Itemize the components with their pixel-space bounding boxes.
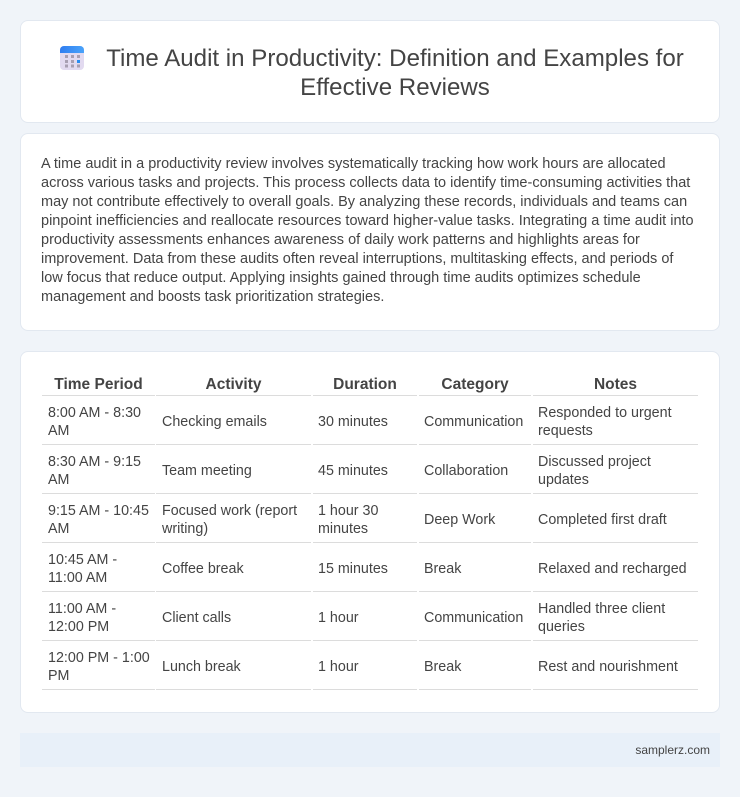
row: 8:00 AM: Communication xyxy=(424,414,523,430)
row: 11:00 AM: 11:00 AM - xyxy=(48,601,116,617)
table headers: Duration xyxy=(333,376,397,393)
row: 11:00 AM: 1 hour xyxy=(318,610,359,626)
text block: description: may not contribute effectively to overall goals. By analyzing these records, individuals and teams can xyxy=(41,194,687,210)
row: 9:15 AM: 9:15 AM - 10:45 xyxy=(48,503,149,519)
table headers: Notes xyxy=(594,376,637,393)
text block: description: A time audit in a productivity review involves systematically tracking how work hours are allocated xyxy=(41,156,666,172)
panel: description xyxy=(20,133,720,331)
row: 9:15 AM: 1 hour 30 xyxy=(318,503,378,519)
table headers: Activity xyxy=(206,376,262,393)
row: 8:00 AM: Checking emails xyxy=(162,414,267,430)
row: 8:00 AM: Responded to urgent xyxy=(538,405,672,421)
row: 8:30 AM: Collaboration xyxy=(424,463,508,479)
row: 9:15 AM: Focused work (report xyxy=(162,503,297,519)
text block: description: low focus that reduce output. Applying insights gained through time audits optimizes schedule xyxy=(41,270,641,286)
row: 12:00 PM: Break xyxy=(424,659,461,675)
row: 9:15 AM xyxy=(48,503,667,537)
row: 12:00 PM: 1 hour xyxy=(318,659,359,675)
text block: description: productivity assessments enhances awareness of daily work patterns and highlights areas for xyxy=(41,232,640,248)
row: 10:45 AM: Relaxed and recharged xyxy=(538,561,687,577)
row: 8:30 AM: 45 minutes xyxy=(318,463,388,479)
row: 8:00 AM xyxy=(48,405,672,439)
text block: description: pinpoint inefficiencies and reallocate resources toward higher-value tasks. Integrating a time audit into xyxy=(41,213,694,229)
panel: title card xyxy=(20,20,720,123)
text block: description: improvement. Data from these audits often reveal interruptions, multitasking effects, and periods of xyxy=(41,251,673,267)
row: 12:00 PM: 12:00 PM - 1:00 xyxy=(48,650,150,666)
text block: description: across various tasks and projects. This process collects data to identify time-consuming activities that xyxy=(41,175,690,191)
title: Time Audit in Productivity: Definition and Examples for xyxy=(106,45,684,72)
row: 9:15 AM: AM xyxy=(48,521,69,537)
table headers: Category xyxy=(441,376,509,393)
row: 8:00 AM: requests xyxy=(538,423,593,439)
title: Effective Reviews xyxy=(300,74,490,101)
row: 11:00 AM: queries xyxy=(538,619,585,635)
row: 8:00 AM: 8:00 AM - 8:30 xyxy=(48,405,141,421)
row: 9:15 AM: Deep Work xyxy=(424,512,495,528)
row: 12:00 PM: Lunch break xyxy=(162,659,241,675)
row: 10:45 AM: 15 minutes xyxy=(318,561,388,577)
row: 9:15 AM: writing) xyxy=(162,521,208,537)
footer bar xyxy=(20,733,720,767)
row: 10:45 AM xyxy=(48,552,687,586)
row: 8:00 AM: AM xyxy=(48,423,69,439)
row: 11:00 AM xyxy=(48,601,666,635)
title xyxy=(106,45,684,101)
table: time audit log xyxy=(42,376,698,690)
row: 11:00 AM: Client calls xyxy=(162,610,231,626)
row: 10:45 AM: Break xyxy=(424,561,461,577)
text block: description: management and boosts task prioritization strategies. xyxy=(41,289,384,305)
text block: description xyxy=(41,156,694,305)
row: 12:00 PM xyxy=(48,650,678,684)
row: 8:30 AM: Discussed project xyxy=(538,454,651,470)
row: 11:00 AM: Communication xyxy=(424,610,523,626)
row: 11:00 AM: Handled three client xyxy=(538,601,665,617)
table headers xyxy=(54,376,637,393)
row: 8:30 AM: updates xyxy=(538,472,589,488)
row: 11:00 AM: 12:00 PM xyxy=(48,619,109,635)
row: 10:45 AM: 11:00 AM xyxy=(48,570,107,586)
row: 10:45 AM: Coffee break xyxy=(162,561,244,577)
row: 12:00 PM: Rest and nourishment xyxy=(538,659,678,675)
row: 8:30 AM: Team meeting xyxy=(162,463,252,479)
table headers: Time Period xyxy=(54,376,143,393)
row: 8:30 AM xyxy=(48,454,651,488)
footer text: samplerz.com xyxy=(635,743,710,757)
row: 12:00 PM: PM xyxy=(48,668,69,684)
row: 9:15 AM: minutes xyxy=(318,521,368,537)
row: 8:30 AM: 8:30 AM - 9:15 xyxy=(48,454,141,470)
row: 8:30 AM: AM xyxy=(48,472,69,488)
row: 8:00 AM: 30 minutes xyxy=(318,414,388,430)
row: 9:15 AM: Completed first draft xyxy=(538,512,667,528)
panel: table card xyxy=(20,351,720,713)
row: 10:45 AM: 10:45 AM - xyxy=(48,552,117,568)
icon: calendar xyxy=(60,46,84,70)
